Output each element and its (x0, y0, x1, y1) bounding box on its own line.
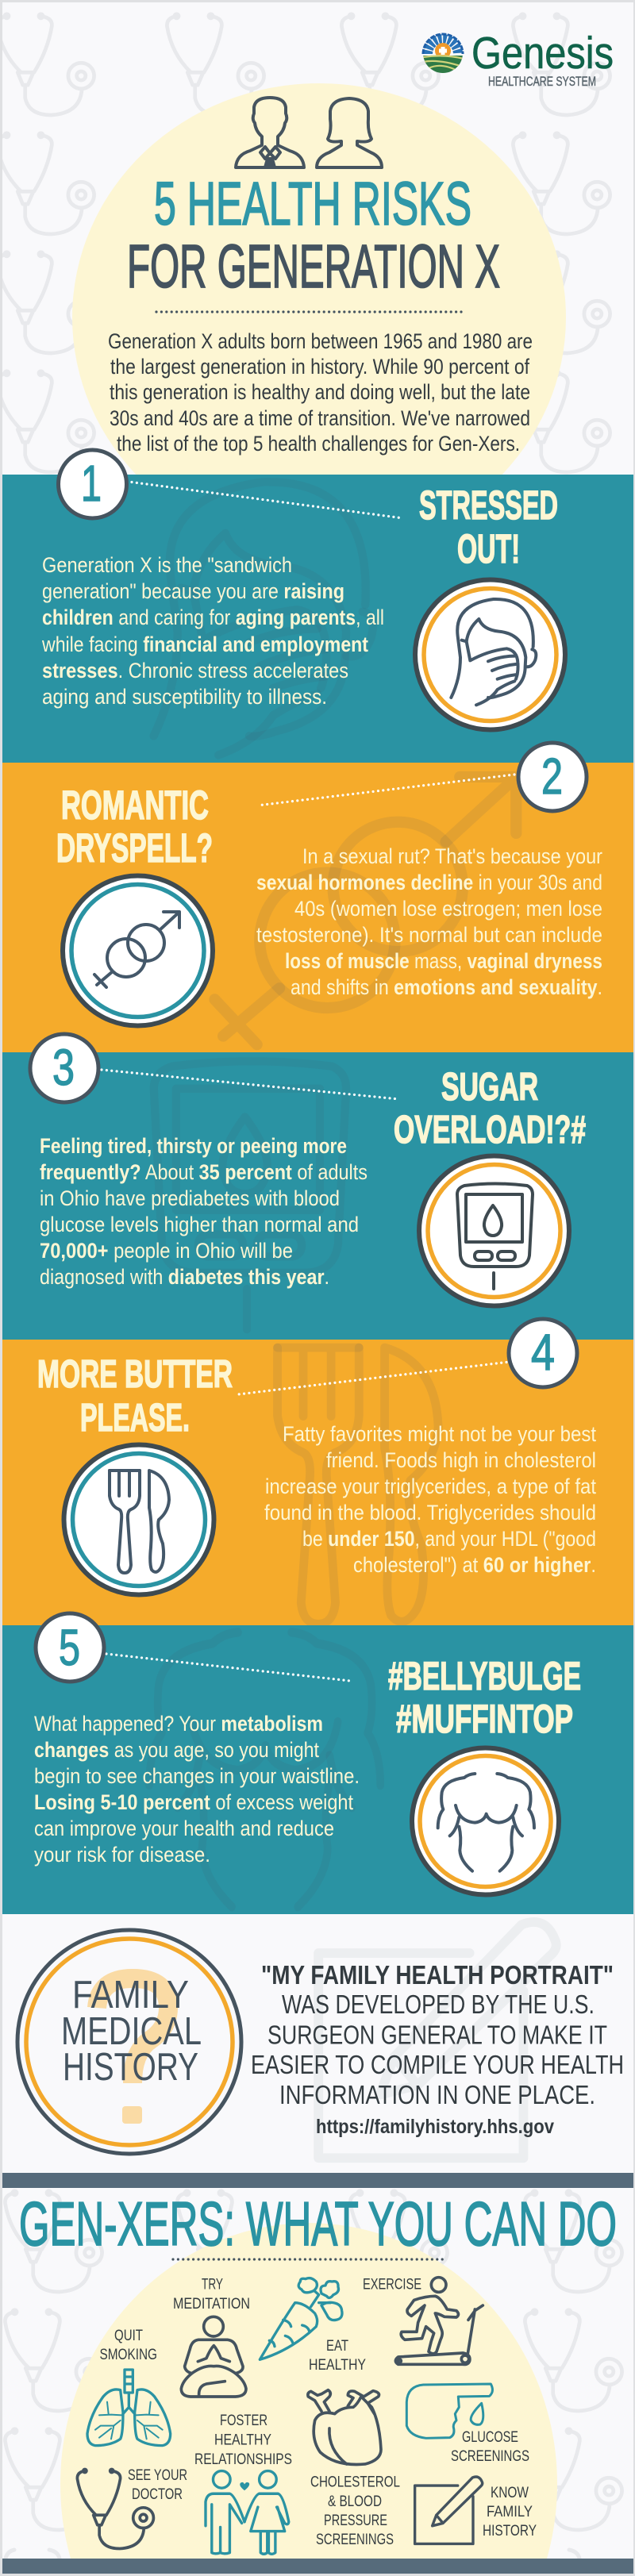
watermark: gender symbols (214, 777, 516, 1044)
number badge 2: 2 (541, 748, 563, 805)
icon: finger and blood drop (406, 2384, 492, 2438)
text: panel 1: children and caring for aging parents, all (42, 606, 384, 629)
icon: question mark (97, 1978, 168, 2124)
heading: sugar overload (394, 1066, 586, 1152)
number badge 1 (59, 450, 127, 518)
text: panel 4: friend. Foods high in cholesterol (326, 1448, 596, 1472)
item: know family history: FAMILY (487, 2504, 533, 2520)
heading: stressed out (419, 483, 558, 571)
text: panel 3: Feeling tired, thirsty or peeing more (40, 1134, 347, 1158)
text: panel 2 (256, 844, 602, 999)
item: cholesterol and blood pressure screenings: SCREENINGS (316, 2532, 394, 2548)
badge: family medical history: HISTORY (63, 2046, 198, 2089)
text: family health portrait (251, 1960, 624, 2138)
connector dots 1 (132, 483, 403, 518)
icon: lungs (87, 2370, 171, 2446)
title: 5 Health Risks: 5 HEALTH RISKS (154, 170, 471, 238)
panel 1: stressed out (2, 450, 633, 763)
watermark: torso (198, 1751, 332, 1759)
text: panel 5 (34, 1712, 360, 1867)
text: panel 4: be under 150, and your HDL ("good (302, 1527, 596, 1551)
panel 2: romantic dryspell (2, 743, 633, 1052)
panel 4: more butter please (2, 1319, 633, 1625)
item: see your doctor: SEE YOUR (128, 2467, 187, 2484)
heading: sugar overload: SUGAR (441, 1066, 538, 1109)
item: know family history: HISTORY (483, 2523, 537, 2539)
item: eat healthy: HEALTHY (309, 2357, 366, 2374)
item: quit smoking (87, 2328, 171, 2446)
item: foster healthy relationships: HEALTHY (214, 2432, 271, 2449)
connector dots 3 (102, 1070, 399, 1099)
text: family health portrait: https://familyhistory.hhs.gov (316, 2116, 554, 2138)
item: glucose screenings: GLUCOSE (462, 2429, 518, 2446)
number badge 5 (36, 1613, 104, 1682)
heading: more butter please: MORE BUTTER (37, 1353, 233, 1396)
item: foster healthy relationships (194, 2413, 292, 2554)
icon: meditating person (181, 2316, 246, 2397)
item: see your doctor: DOCTOR (132, 2486, 183, 2503)
item: cholesterol and blood pressure screenings: PRESSURE (324, 2513, 387, 2529)
text: panel 4: Fatty favorites might not be your best (283, 1422, 596, 1446)
text: panel 5: begin to see changes in your waistline. (34, 1764, 360, 1788)
number badge 3 (30, 1034, 98, 1102)
watermark: stressed face (190, 587, 367, 740)
watermark: fork and knife (278, 1348, 438, 1624)
intro paragraph: the list of the top 5 health challenges for Gen-Xers. (117, 432, 520, 456)
text: panel 3: in Ohio have prediabetes with blood (40, 1186, 340, 1210)
text: panel 5: What happened? Your metabolism (34, 1712, 323, 1736)
badge: family medical history: FAMILY (72, 1974, 189, 2017)
watermark: note and pencil (318, 1922, 556, 2158)
heading: belly bulge muffin top (388, 1654, 581, 1741)
text: panel 1: generation" because you are raising (42, 579, 344, 603)
item: try meditation: TRY (202, 2276, 223, 2293)
intro paragraph: this generation is healthy and doing well, but the late (110, 380, 530, 404)
logo wordmark: Genesis (471, 28, 614, 79)
item: quit smoking: QUIT (114, 2328, 143, 2344)
text: panel 2: loss of muscle mass, vaginal dryness (285, 949, 602, 973)
text: panel 4: found in the blood. Triglycerides should (264, 1501, 596, 1524)
number badge 5: 5 (59, 1619, 80, 1676)
item: try meditation: MEDITATION (173, 2296, 250, 2313)
item: know family history: KNOW (491, 2485, 529, 2501)
number badge 3: 3 (52, 1039, 75, 1096)
item: foster healthy relationships: RELATIONSHIPS (194, 2451, 292, 2468)
text: panel 2: sexual hormones decline in your 30s and (256, 871, 602, 894)
text: panel 5: Losing 5-10 percent of excess weight (34, 1790, 353, 1814)
item: quit smoking: SMOKING (100, 2347, 157, 2363)
icon: glucose meter in ring (419, 1155, 569, 1306)
logo subtitle: HEALTHCARE SYSTEM (488, 74, 596, 89)
item: glucose screenings: SCREENINGS (451, 2448, 529, 2465)
icon: note and pencil (415, 2477, 483, 2543)
heading: stressed out: STRESSED (419, 483, 558, 528)
text: panel 4: cholesterol") at 60 or higher. (353, 1553, 596, 1577)
text: panel 2: 40s (women lose estrogen; men lose (294, 897, 602, 921)
text: panel 1: while facing financial and employment (41, 632, 368, 656)
item: eat healthy (260, 2278, 366, 2374)
text: panel 4: increase your triglycerides, a type of fat (265, 1474, 596, 1498)
item: exercise (363, 2276, 483, 2364)
icon: man and woman outlines (236, 98, 382, 167)
watermark: glucose meter (154, 1061, 346, 1329)
item: cholesterol and blood pressure screenings (308, 2390, 400, 2548)
icon: stressed face in ring (415, 579, 565, 730)
text: panel 4 (264, 1422, 596, 1577)
intro paragraph: 30s and 40s are a time of transition. We've narrowed (110, 406, 530, 430)
intro paragraph: Generation X adults born between 1965 and 1980 are (108, 329, 533, 353)
icon: treadmill runner (395, 2278, 483, 2364)
heading: romantic dryspell (56, 782, 213, 871)
heading: stressed out: OUT! (457, 526, 520, 571)
text: panel 5: changes as you age, so you might (34, 1738, 319, 1762)
text: panel 3: diagnosed with diabetes this year. (40, 1265, 329, 1289)
text: panel 3: frequently? About 35 percent of adults (40, 1160, 368, 1184)
panel 5: belly bulge muffin top (2, 1613, 633, 1914)
item: foster healthy relationships: FOSTER (220, 2413, 267, 2429)
logo emblem (421, 33, 465, 75)
item: cholesterol and blood pressure screenings: & BLOOD (328, 2493, 382, 2510)
text: panel 5: can improve your health and reduce (34, 1817, 334, 1840)
icon: gender symbols in ring (63, 876, 213, 1025)
item: cholesterol and blood pressure screenings: CHOLESTEROL (310, 2474, 400, 2490)
item: know family history (415, 2477, 537, 2543)
connector dots 5 (106, 1654, 350, 1681)
heading: more butter please: PLEASE. (80, 1397, 190, 1440)
badge: family medical history (17, 1930, 241, 2154)
icon: fork and knife in ring (64, 1444, 214, 1595)
number badge 2 (518, 743, 587, 811)
panel: family medical history (17, 1922, 624, 2158)
logo: Genesis HealthCare System (422, 33, 613, 86)
item: see your doctor (77, 2467, 187, 2549)
yellow circle: what you can do (60, 2223, 557, 2559)
panel 3: sugar overload (2, 1034, 633, 1340)
heading: romantic dryspell: ROMANTIC (61, 782, 209, 828)
text: panel 5: your risk for disease. (34, 1843, 210, 1867)
connector dots 4 (238, 1362, 506, 1394)
intro paragraph (108, 329, 533, 456)
text: panel 1: Generation X is the "sandwich (42, 553, 292, 577)
text: panel 3: glucose levels higher than normal and (40, 1213, 359, 1236)
number badge 4 (509, 1319, 577, 1387)
header yellow circle (72, 83, 566, 475)
number badge 4: 4 (531, 1324, 555, 1381)
heading: romantic dryspell: DRYSPELL? (56, 825, 213, 871)
badge: family medical history: MEDICAL (61, 2010, 202, 2053)
intro paragraph: the largest generation in history. While 90 percent of (110, 355, 529, 379)
icon: torso in ring (412, 1747, 559, 1895)
item: glucose screenings (406, 2384, 529, 2465)
text: panel 1: stresses. Chronic stress accelerates (42, 659, 348, 682)
icon: couple holding hands (206, 2471, 289, 2554)
connector dots 2 (257, 775, 514, 805)
text: panel 1 (41, 553, 384, 709)
icon: stethoscope (77, 2469, 153, 2549)
heading: more butter please (37, 1353, 233, 1440)
text: panel 3: 70,000+ people in Ohio will be (40, 1239, 293, 1263)
text: panel 2: and shifts in emotions and sexuality. (291, 975, 602, 999)
item: eat healthy: EAT (326, 2338, 348, 2355)
number badge 1: 1 (81, 455, 102, 512)
item: try meditation (173, 2276, 250, 2397)
icon: heart (308, 2390, 381, 2464)
icon: carrot (260, 2278, 342, 2359)
text: panel 3 (40, 1134, 368, 1289)
text: panel 2: testosterone). It's normal but can include (256, 923, 602, 947)
text: panel 1: aging and susceptibility to illness. (42, 685, 327, 709)
item: exercise: EXERCISE (363, 2276, 421, 2293)
